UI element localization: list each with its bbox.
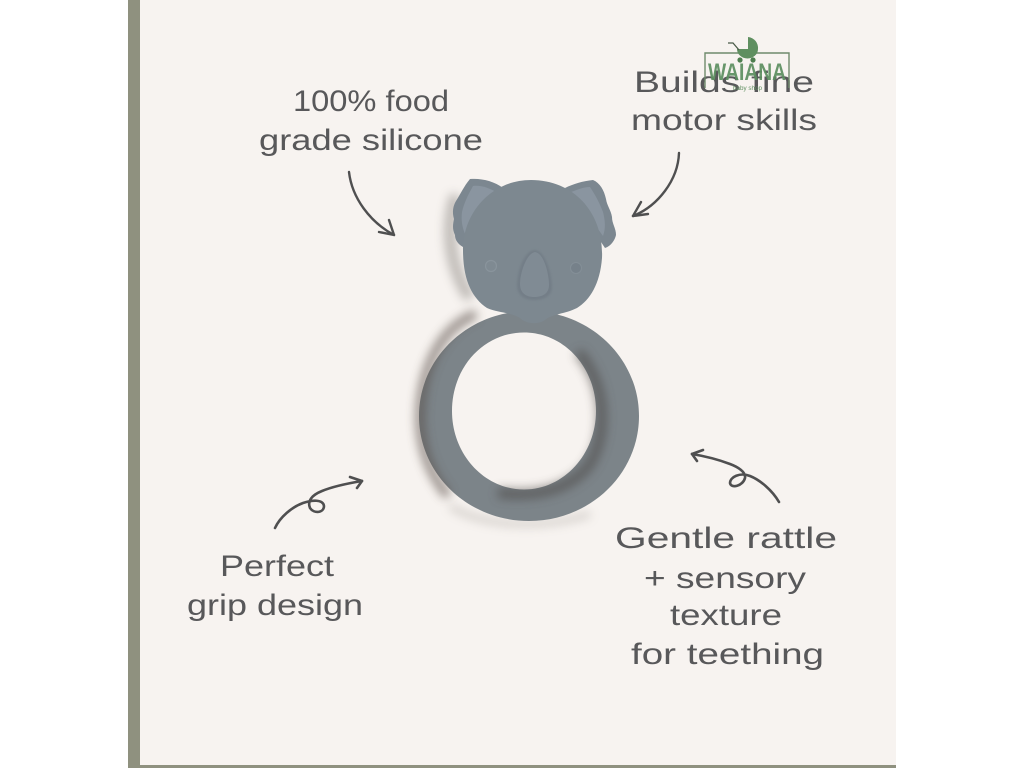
koala left ear	[453, 179, 503, 247]
callout: fine motor skills	[631, 66, 817, 137]
callout: gentle rattle	[615, 522, 837, 671]
koala teether	[419, 179, 639, 524]
koala right eye	[570, 262, 582, 274]
koala head	[463, 180, 602, 323]
callout: gentle rattle: + sensory	[644, 562, 806, 595]
arrow: to top left of koala	[349, 172, 394, 235]
callout: gentle rattle: for teething	[631, 638, 824, 671]
ring cast shadow below	[450, 506, 590, 524]
logo frame	[705, 53, 789, 88]
callout: food grade silicone: 100% food	[293, 85, 449, 118]
koala nose	[517, 250, 552, 300]
callout: food grade silicone: grade silicone	[259, 124, 483, 157]
ring shading	[420, 314, 602, 496]
teether ring	[419, 311, 639, 521]
koala cast shadow	[450, 195, 470, 298]
callout: fine motor skills: Builds fine	[634, 66, 814, 99]
background panel	[128, 0, 896, 768]
callout: food grade silicone	[259, 85, 483, 157]
callout: perfect grip design: Perfect	[220, 550, 335, 583]
logo wordmark: WAIANA	[708, 59, 786, 86]
callout: gentle rattle: texture	[670, 599, 782, 632]
arrow: to top right of koala	[633, 153, 679, 216]
logo tagline: baby shop	[733, 86, 763, 92]
logo: Waiana baby shop	[705, 37, 789, 92]
icon: pram	[728, 37, 758, 63]
callout: gentle rattle: Gentle rattle	[615, 522, 837, 555]
koala right ear	[565, 180, 616, 248]
arrow: curl to bottom left of ring	[275, 477, 362, 528]
callout: perfect grip design: grip design	[187, 589, 363, 622]
callout: fine motor skills: motor skills	[631, 104, 817, 137]
arrow: curl to bottom right of ring	[692, 450, 779, 502]
koala left eye	[486, 260, 496, 272]
callout: perfect grip design	[187, 550, 363, 622]
